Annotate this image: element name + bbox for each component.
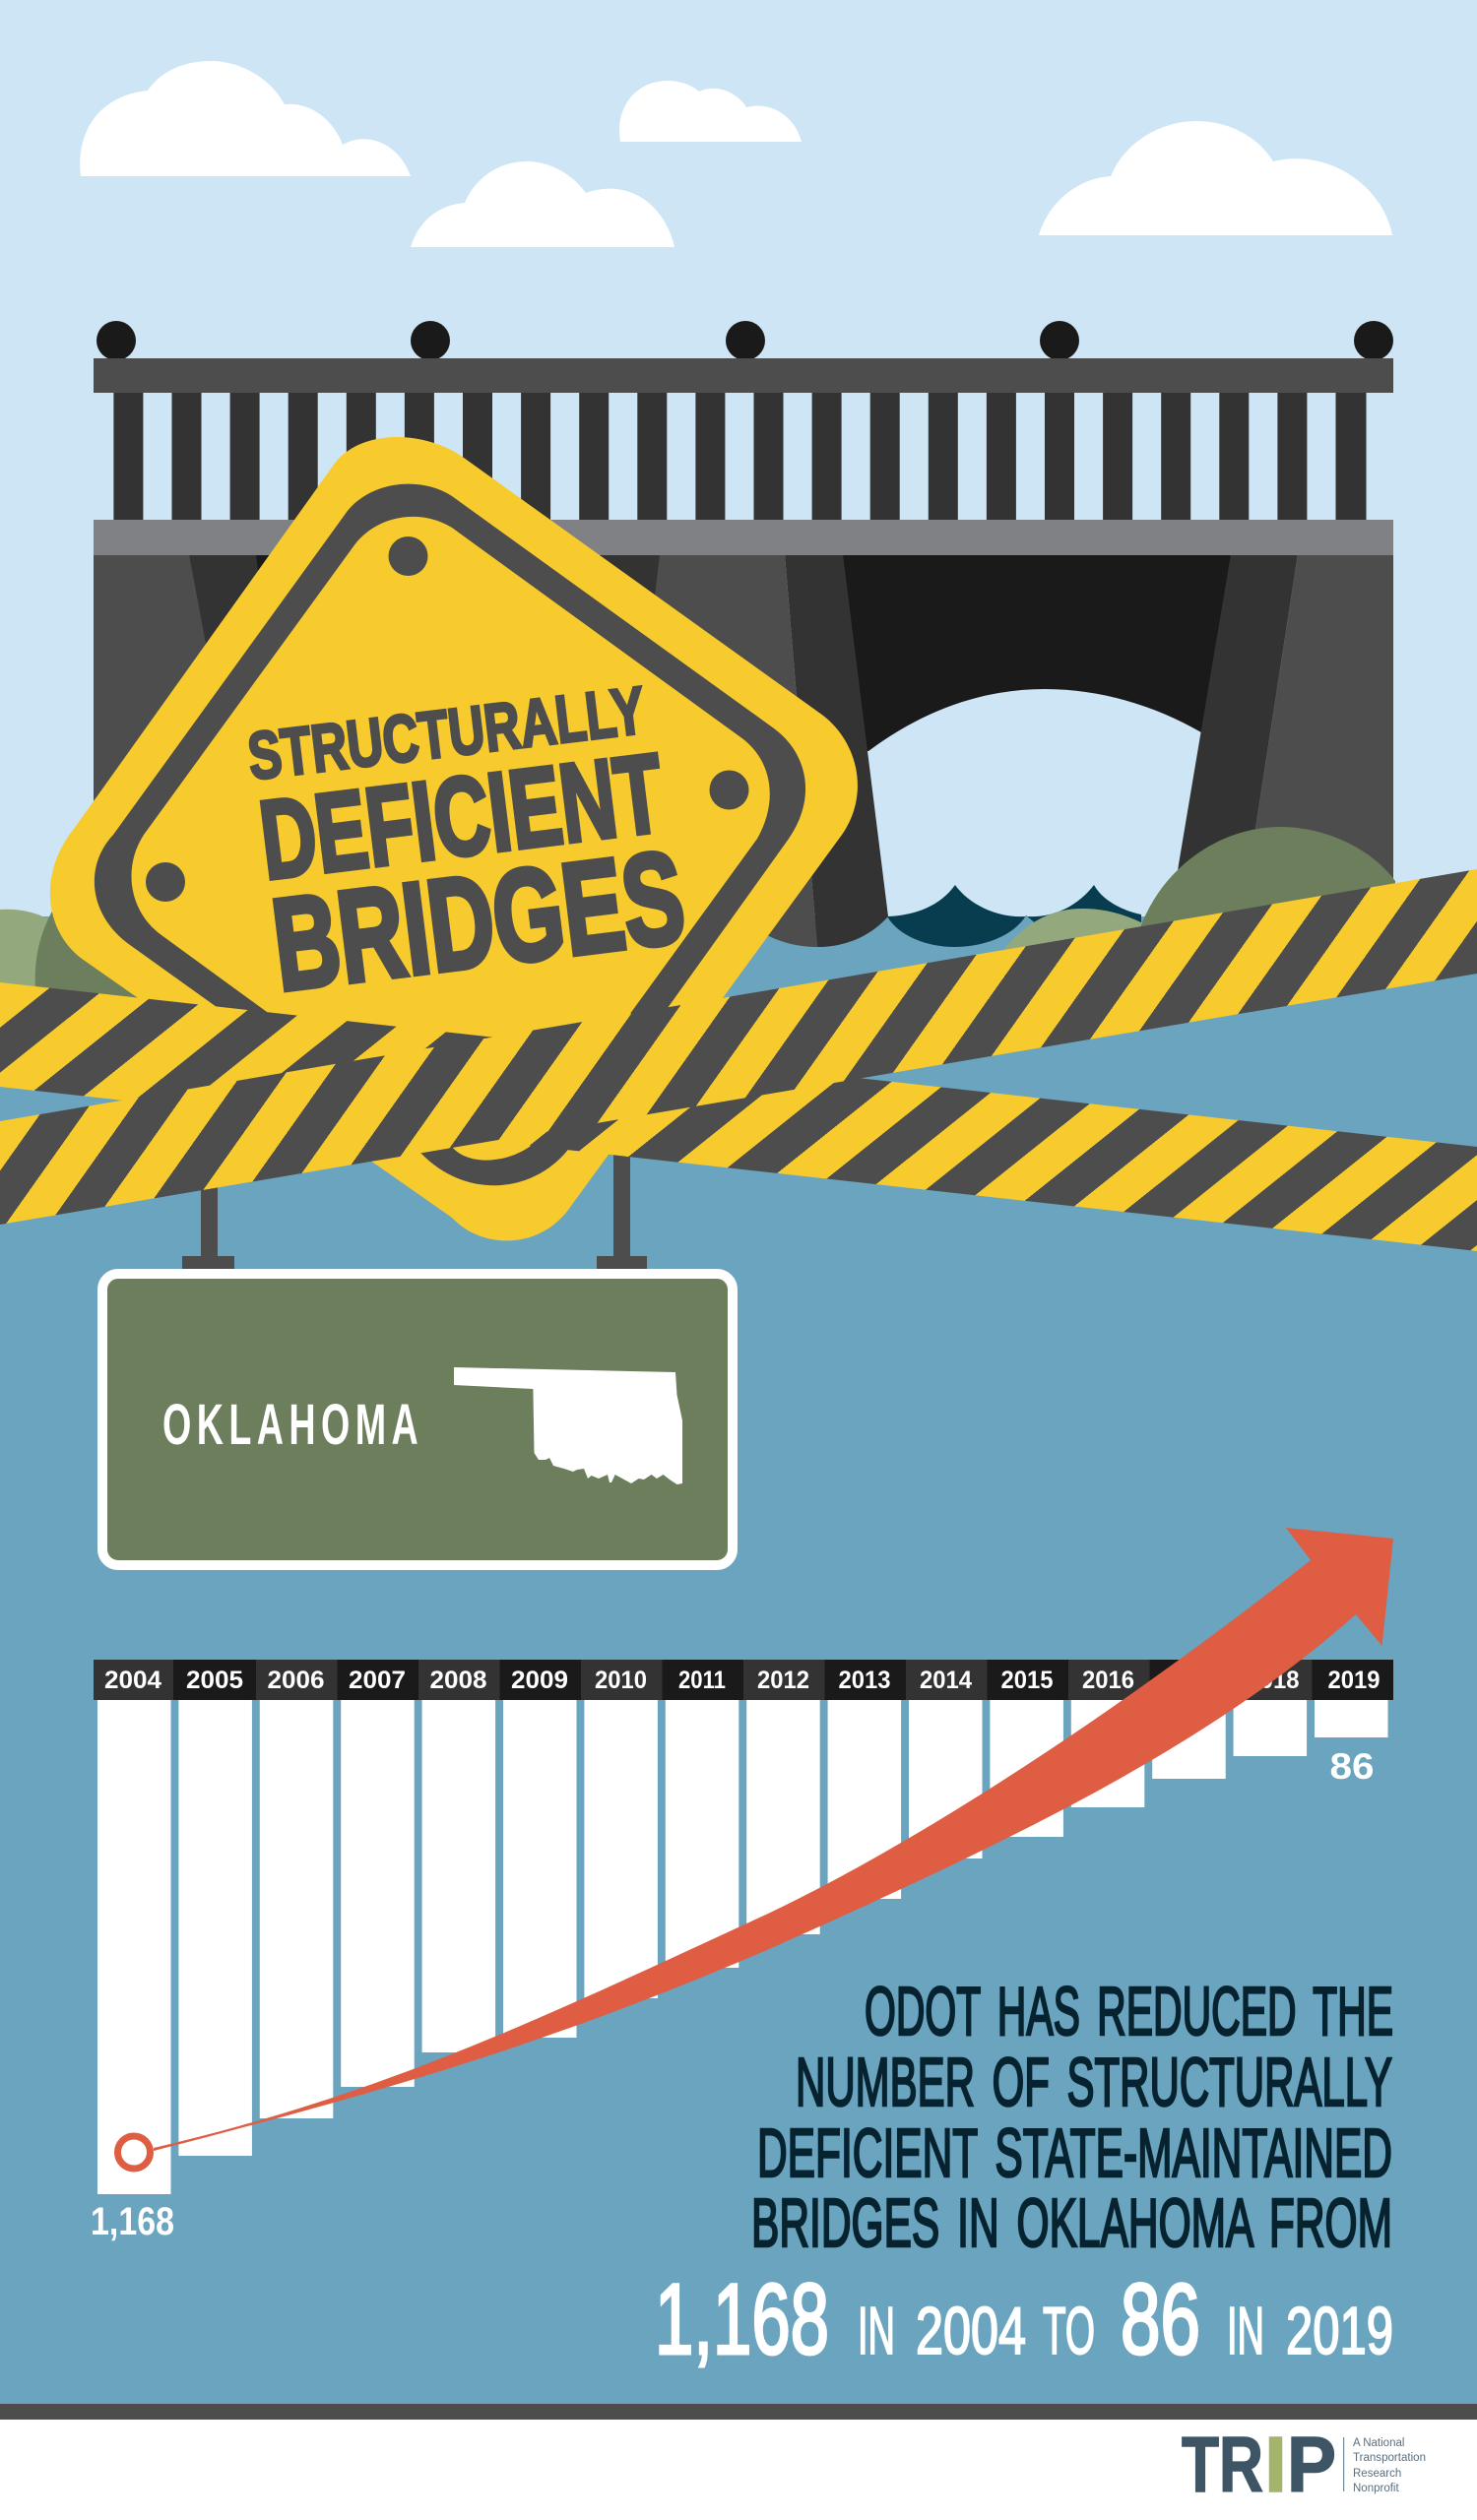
logo letters: TR	[1182, 2421, 1263, 2508]
cloud: right	[1039, 121, 1392, 235]
logo tagline	[1353, 2437, 1426, 2494]
hill: light left	[0, 910, 61, 999]
logo divider	[1343, 2437, 1344, 2491]
summary white numbers line: 2019	[1286, 2294, 1393, 2368]
bridge center pier shade	[785, 554, 888, 947]
value label 2004: 1,168	[91, 2200, 174, 2243]
year labels: 2005	[186, 1667, 243, 1694]
year labels: 2012	[757, 1667, 809, 1694]
bridge hidden left arch shadow	[256, 554, 602, 807]
right post foot	[597, 1256, 647, 1270]
state name: OKLAHOMA	[162, 1394, 423, 1457]
left post	[201, 1152, 218, 1260]
icon: Oklahoma outline	[454, 1367, 682, 1484]
right post	[613, 1142, 630, 1260]
year labels: 2006	[268, 1667, 325, 1694]
bridge hidden left arch	[189, 554, 660, 807]
sign title: structurally: STRUCTURALLY	[244, 672, 649, 794]
clouds	[80, 61, 1392, 247]
hill: dark left	[35, 906, 148, 1004]
year labels: 2017	[1164, 1667, 1215, 1694]
logo tagline: Transportation	[1353, 2452, 1426, 2464]
year labels: 2007	[349, 1667, 406, 1694]
logo letters: I	[1264, 2421, 1287, 2508]
hill: large dark right	[1139, 827, 1395, 970]
value label 2019: 86	[1329, 1746, 1375, 1787]
bridge top rail	[94, 358, 1393, 393]
state sign: Oklahoma	[102, 1274, 733, 1565]
logo letters	[1182, 2421, 1336, 2508]
year labels	[104, 1667, 1381, 1694]
summary white numbers line: 1,168	[655, 2263, 829, 2375]
summary text	[655, 1973, 1393, 2375]
summary white numbers line: 86	[1121, 2263, 1200, 2375]
left post foot	[182, 1256, 234, 1270]
year labels: 2008	[429, 1667, 487, 1694]
summary white numbers line: IN	[1227, 2294, 1264, 2368]
cloud: center	[411, 161, 674, 247]
sign posts	[182, 1142, 647, 1270]
hill: small light right	[995, 909, 1147, 970]
logo tagline: Research	[1353, 2468, 1401, 2480]
bridge left pier	[94, 554, 817, 947]
year labels: 2019	[1327, 1667, 1381, 1694]
bridge right pier shade	[1172, 554, 1298, 915]
year labels: 2014	[920, 1667, 972, 1694]
summary white numbers line: 2004	[916, 2294, 1026, 2368]
logo tagline: A National	[1353, 2437, 1404, 2449]
hills	[0, 827, 1395, 1004]
logo: TRIP	[1182, 2421, 1426, 2508]
sign title	[244, 672, 691, 1018]
chart bars	[97, 1700, 1388, 2194]
red trend arrow	[154, 1528, 1393, 2151]
year labels: 2010	[595, 1667, 647, 1694]
logo letters: P	[1287, 2421, 1336, 2508]
warning sign	[50, 437, 858, 1240]
bridge finials	[96, 321, 1393, 360]
sign yellow diamond	[50, 437, 858, 1240]
caution tape: rising	[0, 869, 1477, 1225]
footer band	[0, 2404, 1477, 2420]
bridge right pier	[1246, 554, 1393, 915]
sign title: deficient: DEFICIENT	[254, 730, 670, 903]
year labels: 2016	[1082, 1667, 1134, 1694]
bridge deck	[94, 520, 1393, 555]
year labels: 2013	[839, 1667, 890, 1694]
summary dark lines	[751, 1973, 1393, 2261]
year labels: 2004	[104, 1667, 161, 1694]
year labels: 2015	[1000, 1667, 1054, 1694]
sign dark inset border	[95, 484, 805, 1185]
sign bolts	[146, 536, 748, 902]
year header strip	[94, 1660, 1393, 1700]
year labels: 2011	[678, 1667, 726, 1694]
sign title: bridges: BRIDGES	[265, 824, 691, 1018]
sky background	[0, 0, 1477, 984]
bridge	[94, 321, 1393, 947]
summary white numbers line: IN	[858, 2294, 895, 2368]
bridge main arch	[837, 554, 1237, 751]
cloud: small top	[619, 81, 802, 142]
arrow start ring	[118, 2136, 150, 2169]
year labels: 2018	[1247, 1667, 1300, 1694]
state sign panel	[102, 1274, 733, 1565]
logo tagline: Nonprofit	[1353, 2483, 1399, 2494]
bridge balusters	[113, 389, 1366, 523]
bar chart	[91, 1660, 1393, 2243]
dark river waves	[887, 885, 1141, 947]
year labels: 2009	[511, 1667, 568, 1694]
footer white area	[0, 2420, 1477, 2520]
summary white numbers line	[655, 2263, 1393, 2375]
summary white numbers line: TO	[1043, 2294, 1095, 2368]
cloud: top left	[80, 61, 411, 176]
water background	[0, 916, 1477, 2404]
caution tape: descending	[0, 982, 1477, 1251]
